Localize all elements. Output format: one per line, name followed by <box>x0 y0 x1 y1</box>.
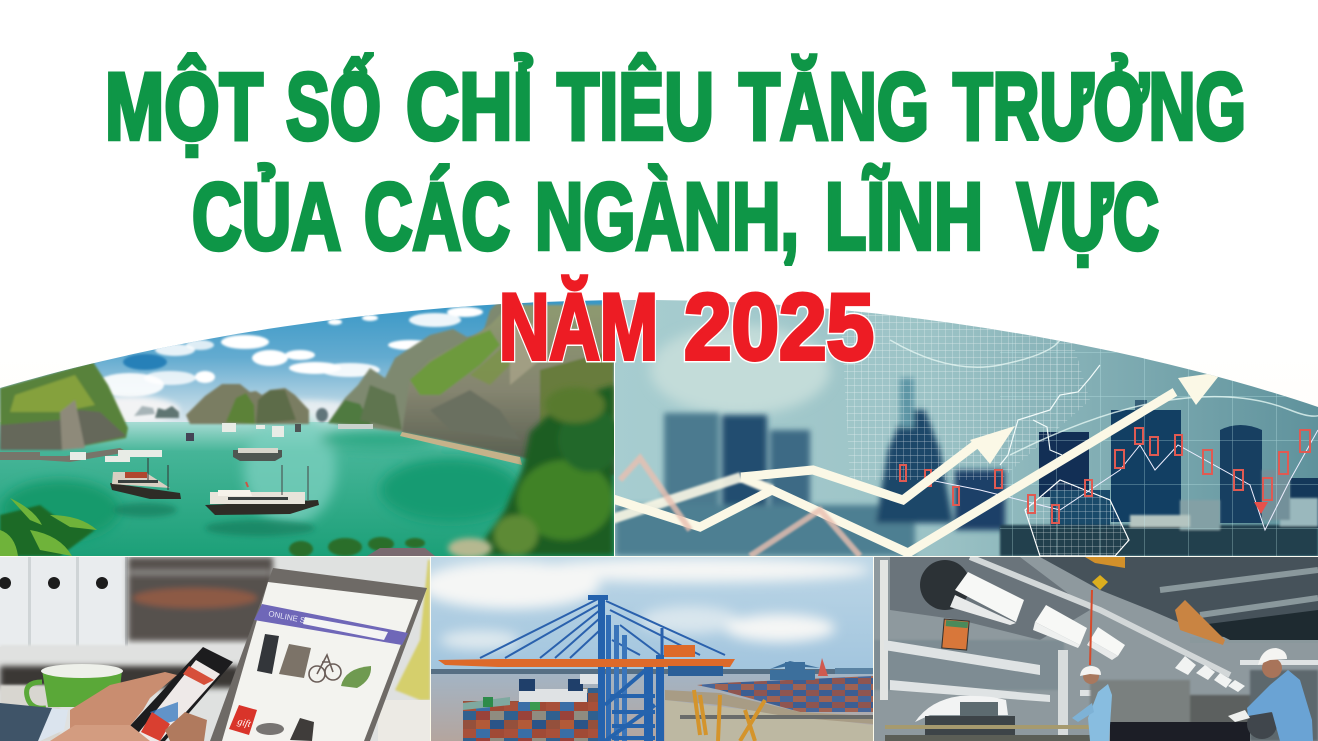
spreader <box>668 666 723 676</box>
product shoes <box>256 723 284 735</box>
product helmet <box>341 666 371 688</box>
lower city <box>1000 470 1318 556</box>
conveyor <box>885 716 1090 741</box>
search box <box>303 617 388 640</box>
zigzag arrow one <box>606 426 1015 521</box>
vertical post <box>1058 650 1068 741</box>
water <box>0 422 614 556</box>
hand <box>50 672 207 741</box>
blue-green base <box>615 290 1318 556</box>
shop name: ONLINE SHOP <box>268 609 323 628</box>
white pot <box>378 700 430 741</box>
photo arc: two top photos <box>0 290 1318 558</box>
title line 2: CÁC <box>364 164 510 270</box>
blue gantry crane <box>438 595 735 741</box>
white bands <box>884 640 1318 702</box>
ceiling beams <box>1160 570 1318 640</box>
lower desk <box>0 685 60 741</box>
orange hoist <box>1085 557 1125 665</box>
left pipe <box>880 560 888 700</box>
overhead rail <box>970 557 1230 675</box>
photo: economy chart and city <box>606 290 1318 556</box>
product laptop <box>279 644 311 678</box>
limestone islets <box>134 384 328 424</box>
title line 2: CỦA <box>192 164 341 270</box>
product bag <box>290 718 314 741</box>
photo: Ha Long Bay <box>0 290 622 558</box>
year heading outline: NĂM <box>499 274 658 379</box>
distant crane <box>770 658 873 680</box>
title line 1 <box>105 54 1246 160</box>
photo: car factory <box>874 557 1318 741</box>
trolley <box>664 645 695 657</box>
container yard <box>665 676 873 724</box>
blurred buildings left <box>615 378 1005 556</box>
red roof <box>367 548 435 556</box>
monitor <box>942 619 969 650</box>
palms <box>289 537 425 557</box>
product bike <box>309 655 341 682</box>
red marker <box>1254 502 1268 514</box>
blurred map patch <box>650 325 830 415</box>
title line 2: NGÀNH, <box>535 164 799 270</box>
zigzag arrow two <box>610 372 1222 553</box>
binders <box>0 557 128 647</box>
photo: online shopping <box>0 557 430 741</box>
dark ceiling <box>1040 557 1318 640</box>
shoreline <box>400 432 522 465</box>
tablet <box>210 568 427 741</box>
map: Australia <box>1025 480 1129 556</box>
right cliff front rock <box>402 305 614 475</box>
shirt cuff <box>37 708 68 741</box>
orange jib <box>1175 600 1225 645</box>
fan <box>920 560 970 610</box>
river inlet right <box>665 700 873 741</box>
boat small <box>233 448 282 461</box>
boat large <box>205 465 319 515</box>
thin curves <box>890 340 1318 455</box>
product phone <box>257 634 279 674</box>
clouds <box>420 558 870 650</box>
candlestick line <box>900 430 1318 530</box>
year heading outline <box>499 274 874 379</box>
year heading: 2025 <box>684 274 874 379</box>
crane bracing <box>605 662 655 741</box>
factory background <box>874 557 1318 741</box>
right cliffs back <box>327 304 502 433</box>
pink blurred lines <box>620 458 860 556</box>
title line 1: CHỈ <box>406 54 533 160</box>
car body <box>915 696 1008 722</box>
orange beam <box>438 659 735 667</box>
sky <box>431 557 873 672</box>
coarse grid <box>1000 332 1318 556</box>
green mug <box>27 664 123 708</box>
title line 1: MỘT <box>105 54 263 160</box>
trees at right <box>484 385 622 556</box>
left cliff <box>0 362 128 450</box>
ship bridge <box>519 679 587 702</box>
machine zone <box>874 640 1064 690</box>
title line 1: TĂNG <box>739 54 929 160</box>
clouds <box>96 307 483 397</box>
foliage bottom left <box>0 498 97 556</box>
plant <box>395 560 430 700</box>
ship containers <box>463 688 605 741</box>
distant boats <box>70 423 373 462</box>
lower lamps row <box>1175 656 1245 692</box>
water highlights <box>0 415 520 540</box>
title line 1: TIÊU <box>557 54 714 160</box>
deep blue sky patch <box>123 354 167 370</box>
wheel hub <box>1247 709 1277 739</box>
dark upper left <box>890 557 1090 640</box>
suit sleeve <box>0 703 52 741</box>
worker left <box>1072 666 1112 741</box>
tablet screen <box>222 582 418 741</box>
phone <box>126 647 233 741</box>
year heading: NĂM <box>499 274 658 379</box>
white ship hull <box>580 674 602 684</box>
title line 2: VỰC <box>1017 164 1159 270</box>
dark shelf <box>128 557 273 641</box>
jetty <box>680 715 873 719</box>
office background <box>0 557 430 741</box>
shop header <box>254 604 408 645</box>
white shelf band <box>0 645 265 667</box>
worker right <box>1228 648 1313 741</box>
dark strip <box>0 666 240 688</box>
title line 1: SỐ <box>286 54 381 160</box>
crane column <box>588 595 664 741</box>
hazy horizon <box>298 397 343 422</box>
year heading <box>499 274 874 379</box>
dark chassis <box>1110 722 1250 741</box>
title line 2: LĨNH <box>825 164 983 270</box>
gift card: gift <box>236 716 252 730</box>
map: Asia outline <box>1000 365 1100 465</box>
machinery mid <box>1090 670 1318 741</box>
gift card <box>229 705 257 735</box>
boat medium <box>110 458 181 499</box>
water <box>431 674 873 741</box>
title line 2 <box>192 164 1159 270</box>
upper lamps <box>950 572 1125 660</box>
dark city buildings right <box>1039 400 1318 540</box>
yellow cranes <box>694 690 765 741</box>
sky <box>0 290 614 425</box>
dark ceiling band <box>1200 610 1318 640</box>
windshield <box>960 702 998 716</box>
photo: container port <box>420 557 873 741</box>
sandy bank <box>448 538 492 558</box>
fine grid <box>840 300 1090 480</box>
boat reflections <box>113 503 315 536</box>
candles <box>900 428 1310 523</box>
far shore <box>431 669 873 674</box>
crane cables <box>480 598 725 658</box>
year heading outline: 2025 <box>684 274 874 379</box>
pier <box>0 448 128 462</box>
